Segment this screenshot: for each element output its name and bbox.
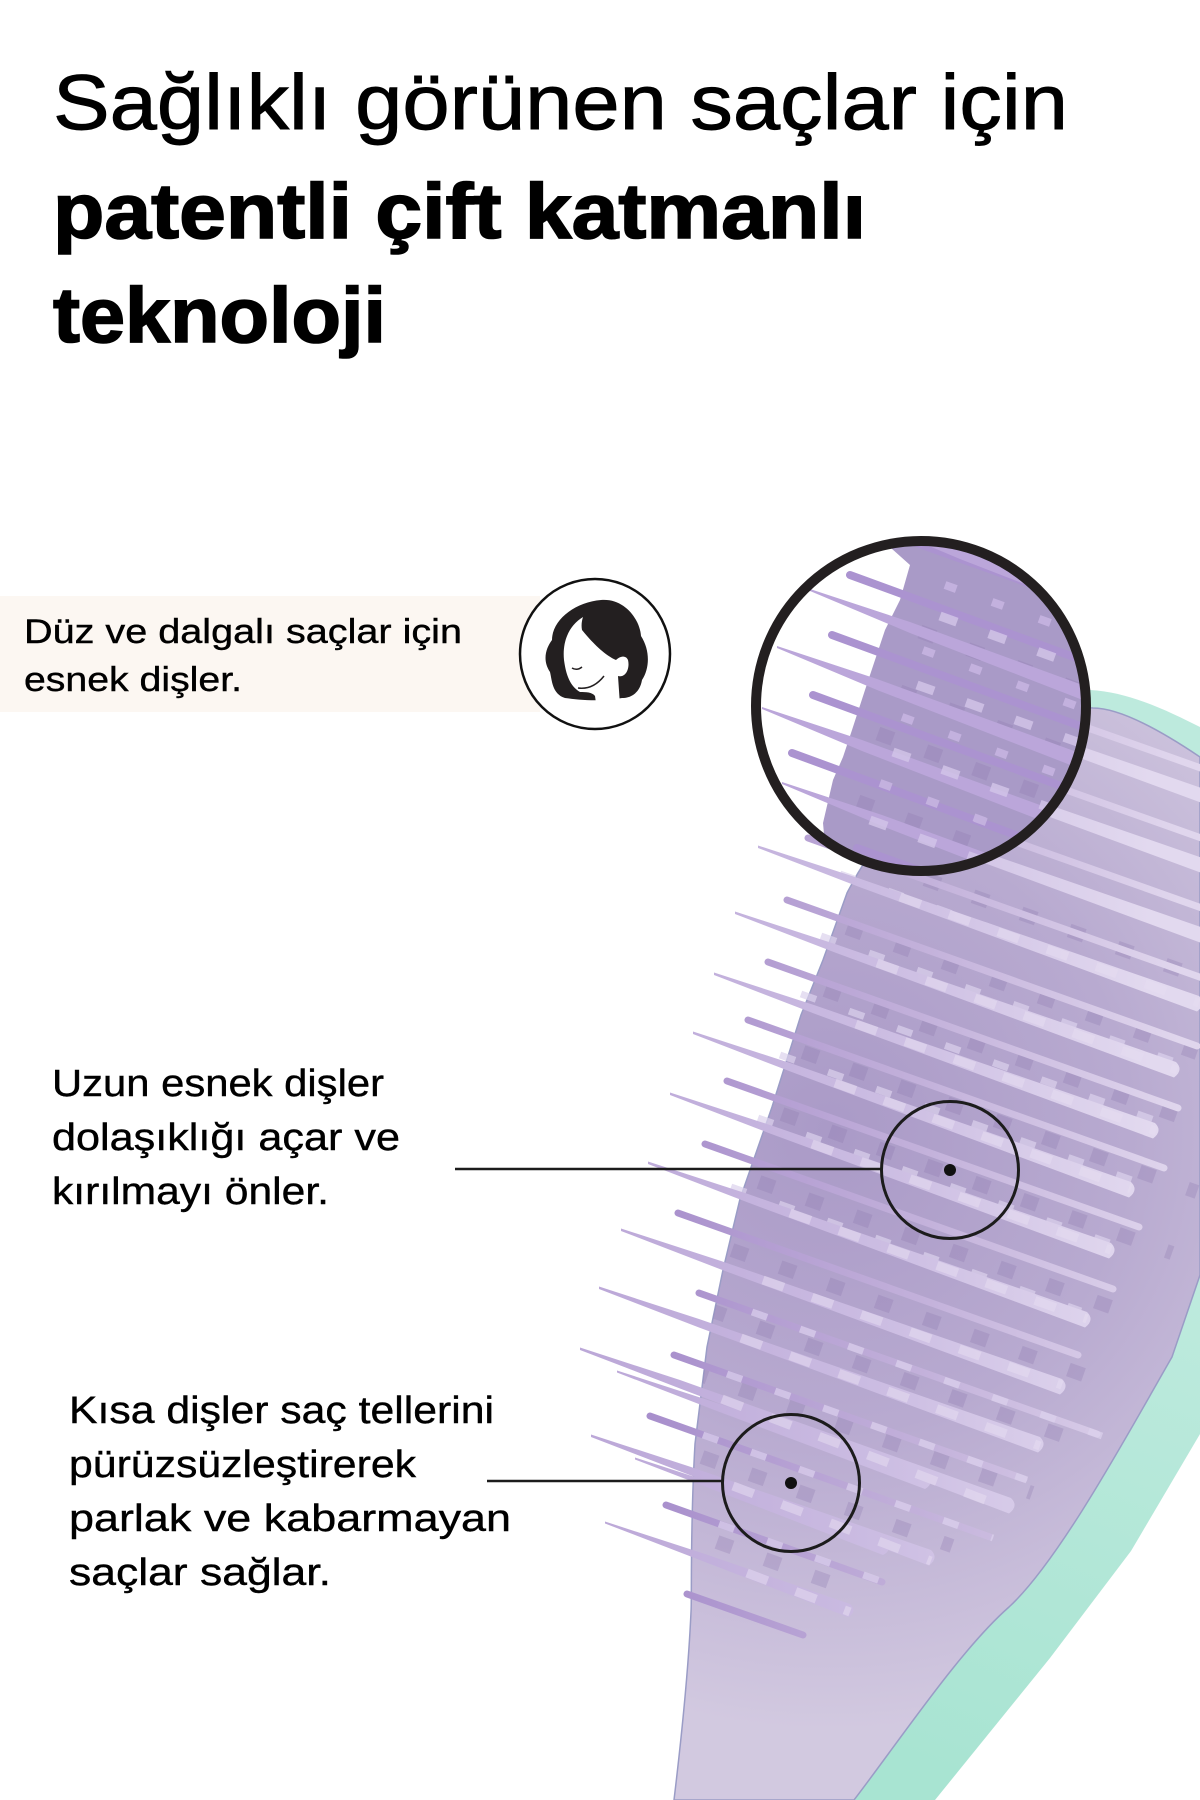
callout: hair type band	[0, 596, 540, 712]
text: long teeth: dolaşıklığı açar ve	[52, 1117, 400, 1159]
short teeth highlights	[703, 874, 1200, 1584]
callout text	[24, 613, 462, 699]
callout text: esnek dişler.	[24, 661, 242, 699]
text: short teeth: parlak ve kabarmayan	[69, 1498, 511, 1540]
text: long teeth: Uzun esnek dişler	[52, 1063, 384, 1105]
brush mint outer shell	[840, 690, 1200, 1800]
long teeth	[580, 660, 1200, 1617]
text: short teeth: pürüzsüzleştirerek	[69, 1444, 417, 1486]
text: short teeth	[69, 1390, 511, 1594]
callout text: Düz ve dalgalı saçlar için	[24, 613, 462, 651]
lens white background	[755, 540, 1087, 872]
lens teeth detail	[762, 546, 1081, 866]
text: long teeth: kırılmayı önler.	[52, 1171, 329, 1213]
long teeth highlights	[722, 897, 1199, 1612]
brush lilac body	[674, 708, 1200, 1800]
title	[53, 58, 1068, 359]
lens black ring	[756, 541, 1086, 871]
short teeth rows	[650, 652, 1200, 1635]
text: long teeth	[52, 1063, 400, 1213]
icon: woman with wavy hair	[520, 579, 670, 729]
callout background band	[0, 596, 540, 712]
text: short teeth: saçlar sağlar.	[69, 1552, 331, 1594]
pointer: short teeth	[487, 1414, 860, 1552]
title: teknoloji	[53, 271, 386, 359]
brush illustration	[580, 500, 1200, 1800]
tooth shadows on body	[692, 862, 1197, 1592]
text: short teeth: Kısa dişler saç tellerini	[69, 1390, 494, 1432]
title: patentli çift katmanlı	[53, 167, 866, 255]
pointer: long teeth	[455, 1102, 1018, 1238]
title: Sağlıklı görünen saçlar için	[53, 58, 1068, 146]
lens circle: close-up of teeth	[751, 536, 1091, 876]
